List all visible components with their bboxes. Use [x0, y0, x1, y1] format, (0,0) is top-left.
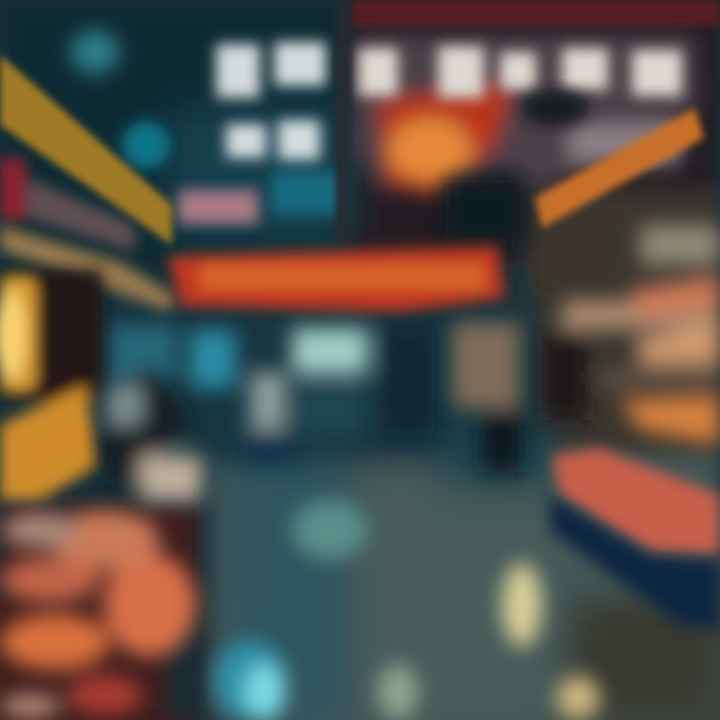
left shelf products: [0, 158, 135, 252]
floor reflections: [214, 500, 600, 720]
left gold shelf: [0, 55, 172, 245]
red pink counter: [552, 448, 720, 555]
sign: white panels left: [216, 42, 326, 160]
small pink sign: [178, 190, 258, 224]
top right maroon strip: [352, 0, 720, 26]
floor base: [0, 600, 720, 720]
shopper left: [100, 370, 202, 501]
counter base dark blue: [550, 495, 720, 630]
orange diagonal sign edge: [534, 108, 704, 228]
right board white blocks: [358, 46, 682, 98]
left yellow display: [0, 270, 102, 500]
dark column: [336, 0, 350, 240]
produce items: [0, 510, 196, 718]
background wall: [0, 273, 516, 496]
sign: right board: [352, 35, 698, 195]
dark block under board: [445, 180, 525, 245]
aisle back: [110, 325, 434, 460]
teal glow: [122, 121, 342, 214]
shopper figure: [452, 322, 522, 472]
right shelves: [545, 225, 720, 445]
left beige shelf: [0, 225, 175, 312]
dark patch on right board: [521, 90, 589, 126]
red orange banner: [168, 246, 505, 312]
wall tones: [100, 110, 720, 720]
ceiling light: [71, 30, 119, 74]
